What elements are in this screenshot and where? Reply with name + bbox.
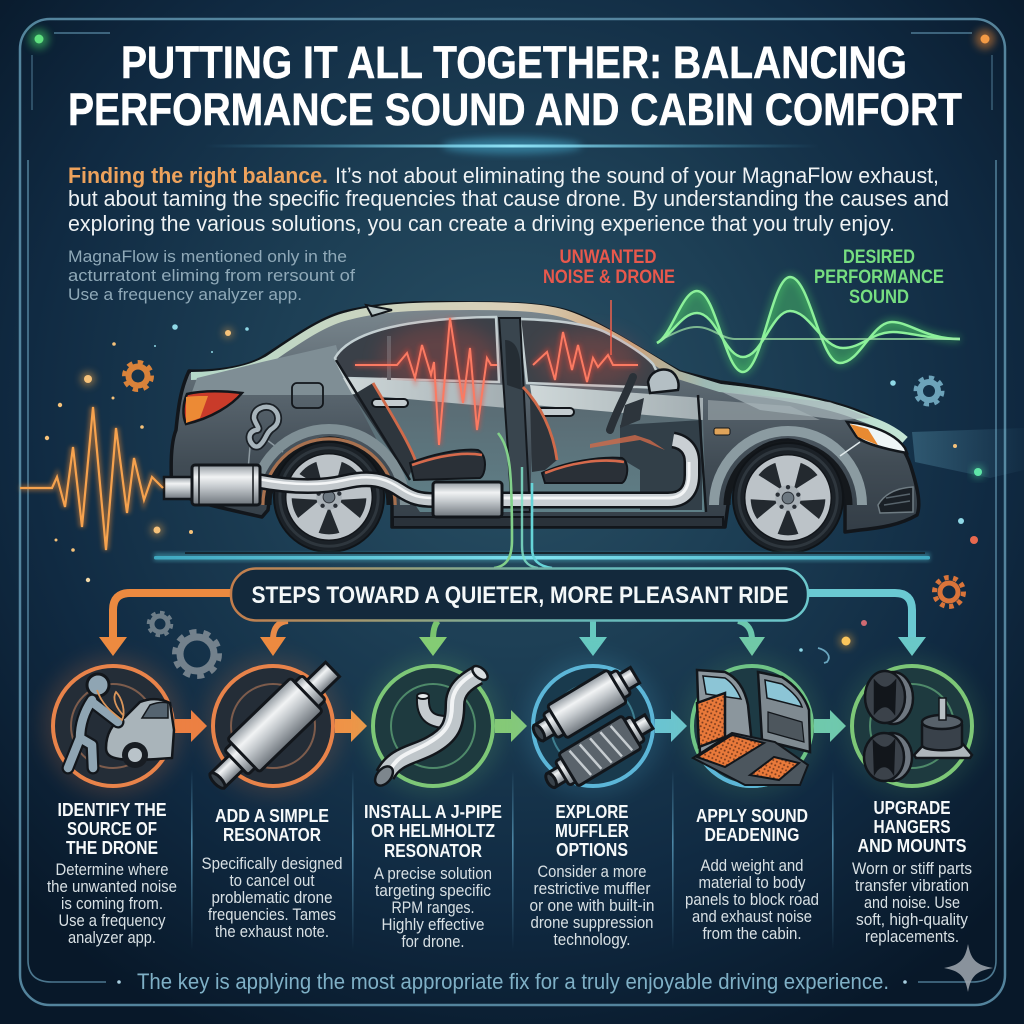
door handles [372,399,574,416]
front marker [714,428,730,435]
steering wheel [610,377,633,430]
sparkle dots [45,324,984,663]
step 4 icon: mufflers [523,656,663,799]
intro paragraph: It’s not about eliminating the sound of your MagnaFlow exhaust, [335,163,939,188]
intro paragraph: exploring the various solutions, you can create a driving experience that you truly enjoy. [68,211,895,236]
arrows: steps bar to each step [99,593,926,656]
side mirror [648,370,679,393]
rear seat [373,383,485,480]
exhaust front pipe [503,440,692,500]
intro paragraph: Finding the right balance. [68,163,328,188]
label: desired sound: SOUND [849,287,909,308]
label: desired sound [814,247,944,308]
step 6 text: UPGRADE [874,797,950,818]
intro paragraph: but about taming the specific frequencies that cause drone. By understanding the causes and [68,186,949,211]
step 4 text [530,801,654,949]
step 1 text: the unwanted noise [47,878,177,896]
sill [393,517,723,527]
step 1 text: Determine where [56,861,168,879]
side note: acturratont eliming from rersount of [68,266,355,285]
step 2 text: frequencies. Tames [208,906,336,924]
step 2 text: problematic drone [212,889,332,907]
step 5 text: from the cabin. [702,925,802,943]
rear wheel [274,442,384,552]
corner light: orange [975,29,995,49]
fuel door [292,383,323,408]
step 3 text: for drone. [402,933,464,951]
step 1 text: is coming from. [61,895,163,913]
car [164,303,919,553]
step 6 icon: hangers and mounts [842,656,982,796]
step 4 text: Consider a more [538,863,646,881]
title divider glow [205,138,819,154]
ground glow line [154,552,930,561]
step 6 text: AND MOUNTS [858,835,966,856]
spoiler fin [366,305,392,316]
cutaway interior [352,392,512,512]
arrow 3 [419,621,447,656]
step 3 icon: j-pipe [363,656,503,796]
step 6 text: Worn or stiff parts [852,860,972,878]
rear window [335,317,499,382]
tailpipe [164,477,194,499]
step 4 text: OPTIONS [556,839,628,860]
mid muffler [433,482,502,517]
closing line: The key is applying the most appropriate fix for a truly enjoyable driving experience. [137,969,889,994]
ear icon [248,407,283,470]
step 6 text [852,797,972,946]
step 2 text: ADD A SIMPLE [215,805,329,826]
step 3 text: OR HELMHOLTZ [371,820,495,841]
rear door dark panel [353,383,416,478]
step 2 text: to cancel out [230,872,315,890]
step 2 text: the exhaust note. [215,923,329,941]
step 1 text: analyzer app. [68,929,156,947]
connecting arrows between steps [175,710,846,742]
step 6 text: replacements. [865,928,959,946]
step 3 text: RESONATOR [384,840,482,861]
step 2 text: RESONATOR [223,824,321,845]
step 6 text: transfer vibration [855,877,969,895]
roof highlight [191,306,905,440]
step 4 text: MUFFLER [555,820,629,841]
steps heading pill: STEPS TOWARD A QUIETER, MORE PLEASANT RIDE [252,582,788,609]
intro paragraph [68,163,949,236]
label: unwanted noise: NOISE & DRONE [543,267,675,288]
wheel arches [253,429,862,505]
trunk band [192,345,353,395]
label: unwanted noise [543,247,675,288]
gear: orange top right [934,578,964,606]
step 4 text: technology. [554,931,630,949]
step 3 text [364,801,502,951]
step 1 text: IDENTIFY THE [58,799,166,820]
step 4 text: EXPLORE [556,801,628,822]
step 5 icon: sound deadening [682,656,822,796]
headlight [847,422,907,453]
gear: large grey [174,632,220,676]
front vent [878,487,913,513]
step 5 text: panels to block road [685,891,819,909]
waveform: red drone in cabin [355,300,638,445]
step 5 text: Add weight and [700,857,804,875]
tail light [183,391,242,424]
arrow 6 [808,593,926,656]
label: unwanted noise: UNWANTED [560,247,656,268]
side note [68,247,355,304]
step 3 text: targeting specific [375,882,491,900]
step 3 text: A precise solution [374,865,492,883]
steps heading pill [231,568,808,620]
step 6 text: HANGERS [874,816,950,837]
front window [520,319,665,388]
step 1 text: Use a frequency [58,912,166,930]
car body shell [171,303,919,532]
belt stripes [343,378,507,408]
connector lines to steps bar [494,433,552,568]
arrow 4 [579,621,607,656]
corner light: green [29,29,49,49]
step 5 text: and exhaust noise [692,908,812,926]
gear: orange left [124,362,152,390]
step 5 text: DEADENING [704,824,800,845]
icon: star sparkle [944,944,993,992]
step 2 icon: resonator [199,653,349,800]
step 6 text: and noise. Use [864,894,960,912]
step 1 text: THE DRONE [66,837,158,858]
label: desired sound: DESIRED [843,247,915,268]
step 5 text: material to body [698,874,806,892]
red window tint [380,324,500,396]
gear: blue right [916,378,942,404]
arrow 2 [260,621,288,656]
waveform: orange exhaust [20,407,163,550]
title: PUTTING IT ALL TOGETHER: BALANCING [121,37,907,88]
step 1 icon: diagnose [43,656,183,796]
waveform: desired green sound [657,277,960,372]
title [68,37,962,135]
front seat [522,387,665,483]
rear muffler [192,465,260,505]
bumper seam [840,442,860,456]
step 5 text [685,805,819,943]
front wheel [733,443,843,553]
arrow 1 [99,593,232,656]
headlight beam [912,428,1024,478]
step 1 text [47,799,177,947]
step 3 text: Highly effective [382,916,484,934]
step 1 text: SOURCE OF [67,818,157,839]
step 6 text: soft, high-quality [856,911,969,929]
door lines and pillar [336,360,706,512]
gear: small grey [148,612,172,636]
step 2 text [202,805,342,941]
side note: Use a frequency analyzer app. [68,285,302,304]
label: desired sound: PERFORMANCE [814,267,944,288]
step 4 text: or one with built-in [530,897,654,915]
step 4 text: drone suppression [530,914,654,932]
step 5 text: APPLY SOUND [696,805,808,826]
side note: MagnaFlow is mentioned only in the [68,247,347,266]
step 4 text: restrictive muffler [534,880,651,898]
arrow 5 [738,621,765,656]
step 2 text: Specifically designed [202,855,342,873]
step 3 text: RPM ranges. [392,899,474,917]
step 3 text: INSTALL A J-PIPE [364,801,502,822]
column separators [191,770,834,950]
exhaust rear pipe [258,479,434,500]
